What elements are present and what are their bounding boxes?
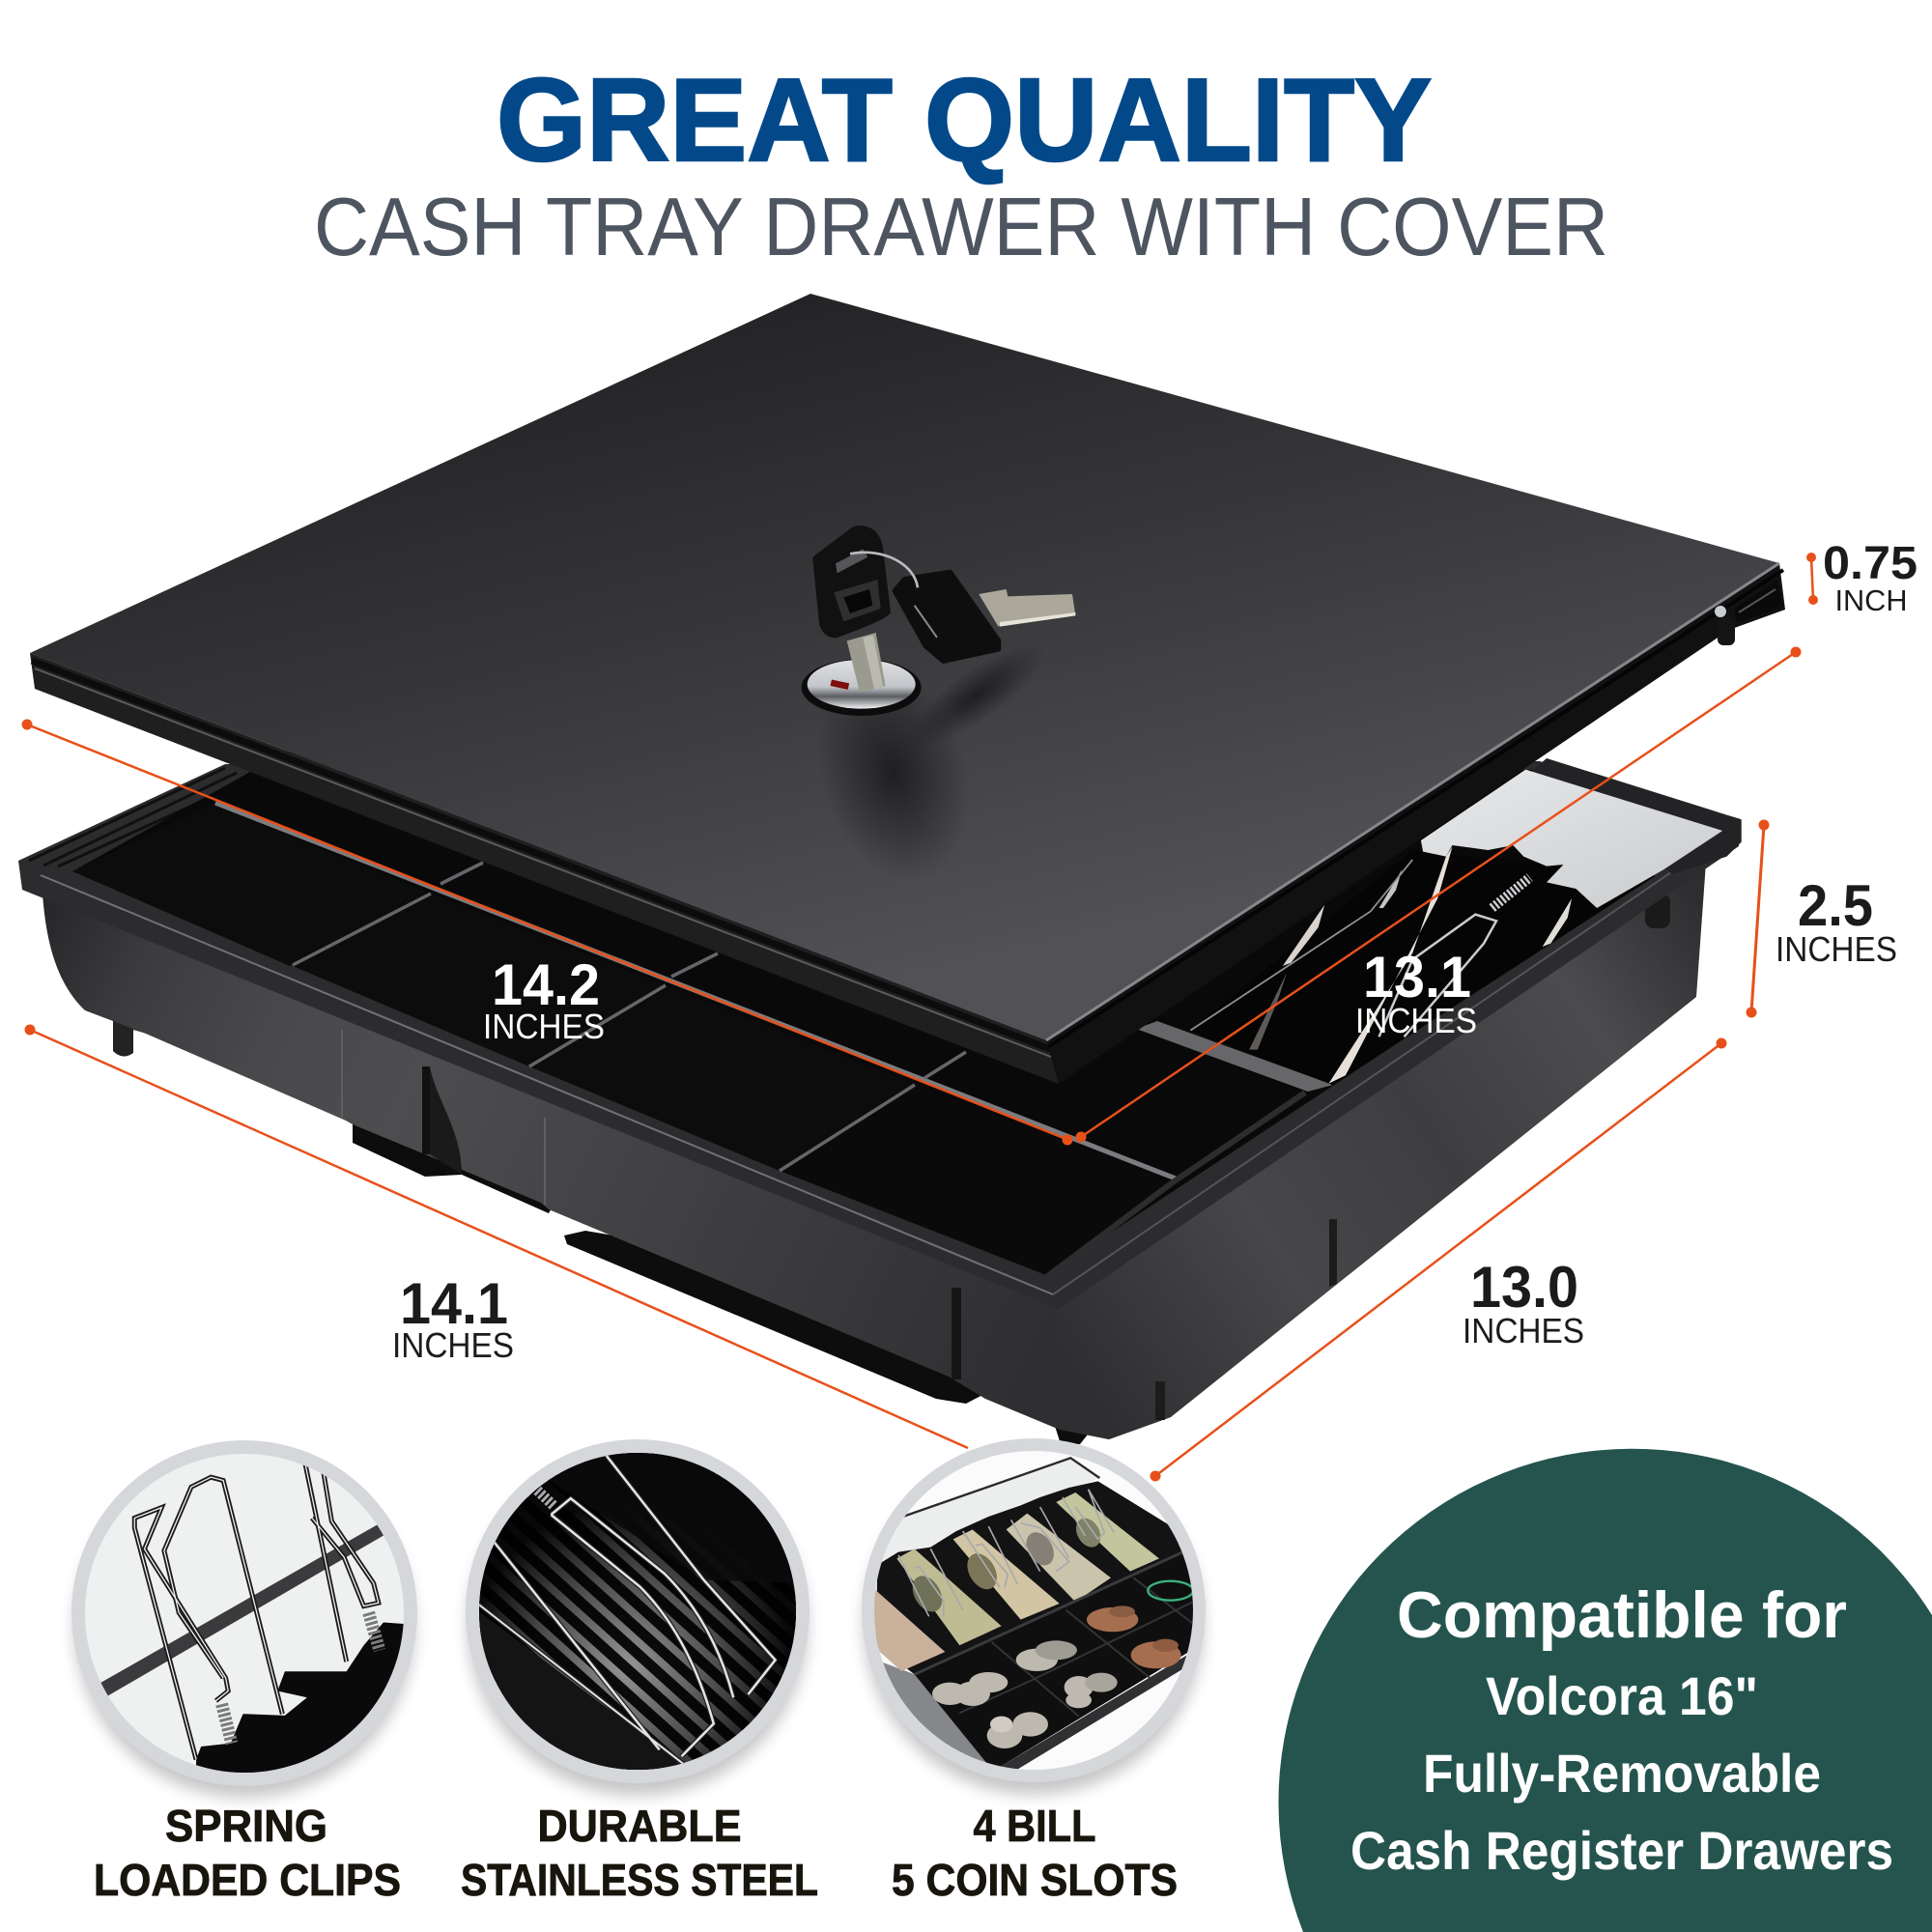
feature label: 4 bill 5 coin slots: 5 COIN SLOTS: [892, 1855, 1178, 1905]
dimension label: 13.1 inches: 13.1: [1363, 945, 1471, 1009]
dimension label: 14.2 inches: INCHES: [483, 1007, 605, 1046]
dimension label: 14.1 inches: 14.1: [400, 1271, 508, 1336]
lid hinge pin: [1715, 580, 1783, 645]
lock shadow: [795, 628, 1058, 898]
compatibility text: Volcora 16": [1486, 1665, 1758, 1726]
dimension label: 2.5 inches: INCHES: [1776, 929, 1897, 969]
tray back rim around plate: [1530, 758, 1742, 874]
lid side faces: [30, 653, 1059, 1084]
coins: [932, 1640, 1118, 1748]
compartment walls: [72, 805, 1173, 1275]
key shaft: [847, 633, 886, 693]
dimension label: 14.1 inches: INCHES: [392, 1325, 514, 1365]
spring clip plate: [1421, 770, 1722, 908]
tray front body: [43, 894, 1171, 1439]
compatibility text: Fully-Removable: [1423, 1743, 1821, 1804]
dimension label: 14.1 inches: [392, 1271, 514, 1365]
dimension label: 14.2 inches: [483, 952, 605, 1046]
tray body seams: [342, 894, 1670, 1420]
dimension label: 14.2 inches: 14.2: [492, 952, 600, 1017]
feature label: spring loaded clips: SPRING: [165, 1801, 327, 1851]
compatibility text: Compatible for: [1397, 1578, 1847, 1652]
tray side body: [1043, 850, 1720, 1439]
divider between coin and bill trays: [1136, 1021, 1333, 1092]
dimension label: 0.75 inch: [1823, 538, 1918, 617]
bill compartment: [1190, 758, 1742, 1085]
dimension lines: [21, 553, 1818, 1482]
dimension label: 2.5 inches: 2.5: [1798, 873, 1873, 938]
second key fob: [895, 573, 998, 661]
feature label: spring loaded clips: LOADED CLIPS: [94, 1855, 401, 1905]
dimension line: 13.1: [1076, 647, 1801, 1142]
lid top surface: [30, 294, 1779, 1040]
second key blade: [979, 589, 1075, 626]
bill clips: [898, 1490, 1114, 1616]
dimension line: 0.75: [1806, 553, 1818, 605]
dimension label: 0.75 inch: INCH: [1835, 583, 1907, 617]
compatibility text: [1350, 1578, 1893, 1881]
panel: compatibility badge: [1278, 1449, 1932, 1932]
title: GREAT QUALITY: [497, 54, 1432, 185]
dimension line: 2.5: [1747, 819, 1770, 1018]
tray casing: [883, 1662, 1001, 1766]
dimension label: 13.0 inches: 13.0: [1470, 1255, 1578, 1320]
tray rim: [18, 761, 1741, 1309]
dimension line: 13.0: [1150, 1037, 1727, 1482]
feature label: durable stainless steel: DURABLE: [537, 1801, 742, 1851]
subtitle: CASH TRAY DRAWER WITH COVER: [314, 182, 1608, 273]
compatibility text: Cash Register Drawers: [1350, 1820, 1893, 1881]
tray underside tabs: [113, 1009, 1092, 1444]
feature circle: bill and coin slots: [862, 1438, 1206, 1795]
banknotes: [872, 1492, 1159, 1671]
back plate: [876, 1457, 1099, 1565]
bill area: [876, 1481, 1186, 1674]
dimension line: 14.1: [25, 1024, 968, 1448]
feature label: 4 bill 5 coin slots: 4 BILL: [974, 1801, 1095, 1851]
dimension label: 13.0 inches: [1463, 1255, 1584, 1350]
icon: lock and keys: [802, 529, 1075, 716]
compartment dividers: [215, 803, 1305, 1277]
dimension label: 13.0 inches: INCHES: [1463, 1311, 1584, 1350]
coin tray: [915, 1550, 1200, 1770]
feature label: durable stainless steel: [461, 1801, 818, 1905]
feature label: 4 bill 5 coin slots: [892, 1801, 1178, 1905]
lock cylinder: [802, 659, 922, 716]
feature label: durable stainless steel: STAINLESS STEEL: [461, 1855, 818, 1905]
dimension line: 14.2: [21, 719, 1072, 1146]
feature label: spring loaded clips: [94, 1801, 401, 1905]
key ring: [850, 553, 918, 587]
feature circle: spring loaded clips: [71, 1440, 417, 1798]
first key fob: [816, 529, 887, 635]
feature circle: durable stainless steel: [466, 1439, 810, 1796]
spring clips: [1249, 847, 1572, 1084]
dimension label: 2.5 inches: [1776, 873, 1897, 969]
paper clips: [1148, 1581, 1193, 1601]
cash tray drawer: [18, 750, 1742, 1444]
dimension label: 13.1 inches: [1355, 945, 1477, 1040]
dimension label: 0.75 inch: 0.75: [1823, 538, 1918, 589]
lid cover: [30, 294, 1785, 1084]
tray interior: [72, 750, 1723, 1275]
dimension label: 13.1 inches: INCHES: [1355, 1001, 1477, 1040]
